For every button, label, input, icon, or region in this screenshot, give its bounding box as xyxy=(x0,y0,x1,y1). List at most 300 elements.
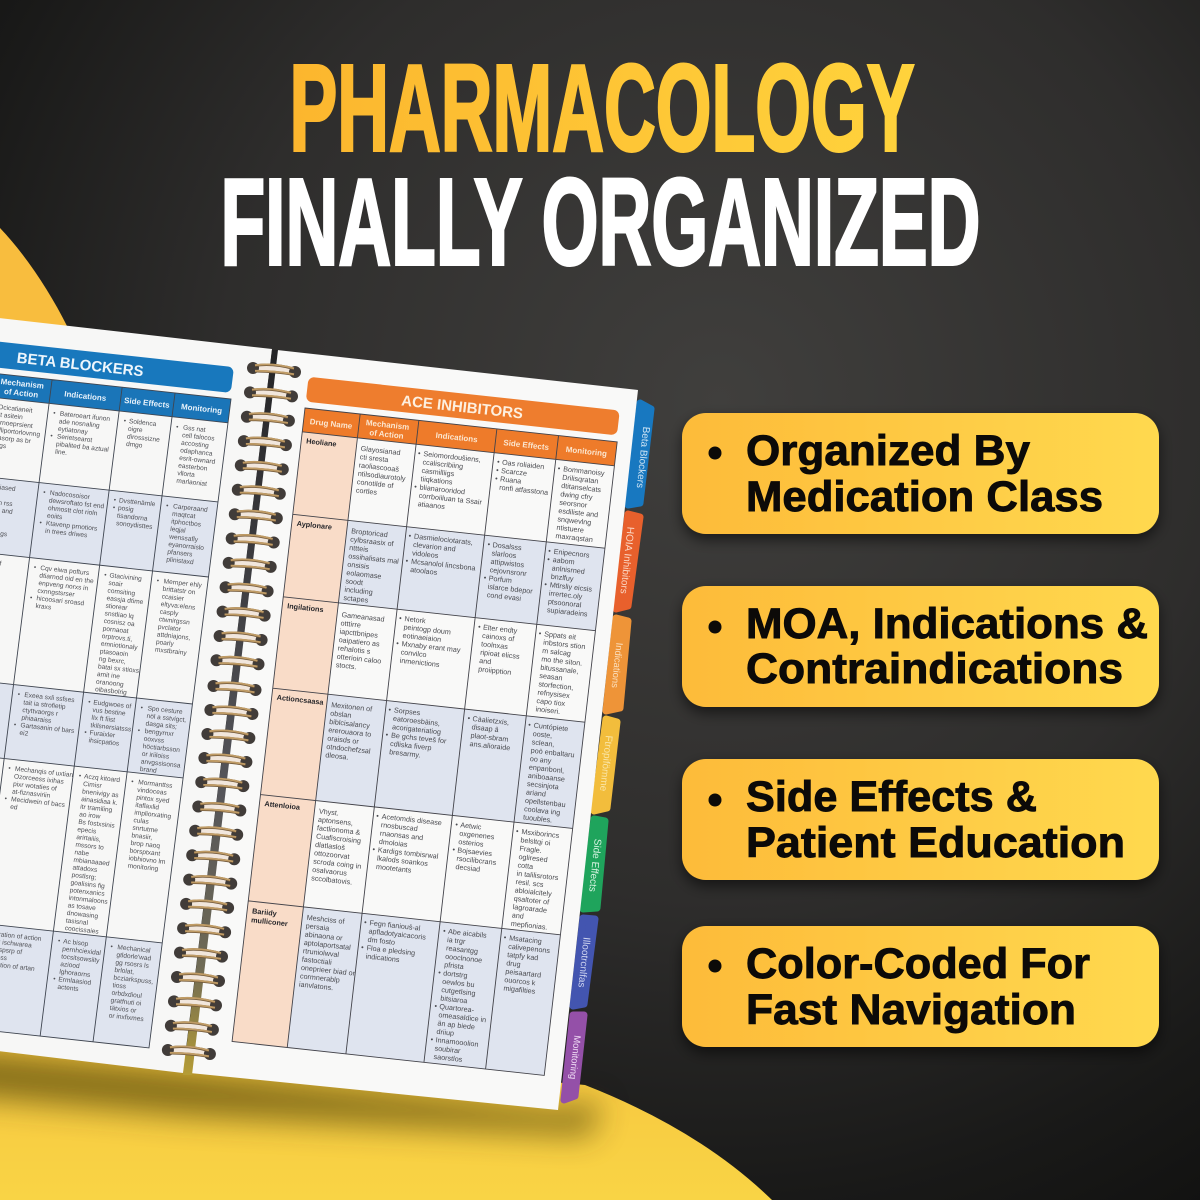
left table: side effects column: aziood xyxy=(60,961,80,970)
feature pill: color-coded for fast navigation: Color-Coded For xyxy=(746,940,1090,988)
right table: mechanism column: persaia xyxy=(305,921,330,933)
right table: mechanism column: cylbsraasix of xyxy=(350,535,394,548)
left table: indications column: ade nosnaling xyxy=(58,418,100,430)
left table: monitoring column: Gss nat xyxy=(183,425,206,434)
right table: side effects column: Ruana xyxy=(500,474,522,486)
tab: Beta Blockers: Beta Blockers xyxy=(634,426,651,489)
left table: indications column: • xyxy=(8,765,12,772)
left table: monitoring column: esrit-ownard xyxy=(179,455,216,466)
right table: mechanism column: Meshciss of xyxy=(306,913,345,926)
title xyxy=(220,40,980,292)
left table: monitoring column: vllorta xyxy=(177,470,195,479)
feature pill: organized by medication class: Organized By xyxy=(746,427,1030,475)
left table: monitoring column: brittatstr on xyxy=(162,586,196,596)
right table: side effects column: rsocilibcrans xyxy=(456,854,497,867)
right table: side effects column: Oas roliaiden xyxy=(502,458,545,471)
tab: fourth section xyxy=(594,719,617,811)
left table: indications column: • xyxy=(13,722,17,729)
right table: monitoring column: aabom xyxy=(552,555,575,566)
right table: side effects column: toolnxas xyxy=(481,639,509,651)
left table: side effects column: pernhciexidal xyxy=(62,946,102,957)
left table: monitoring column: brlolat, xyxy=(114,967,135,976)
left table: side effects column: • xyxy=(58,938,61,945)
right table: monitoring column: calivepenons xyxy=(508,942,551,955)
drug names: Attenloioa xyxy=(264,799,301,812)
left table: monitoring column: culas xyxy=(133,817,150,826)
right table: mechanism column: ererouaora to xyxy=(328,725,372,739)
feature pill: organized by medication class: Medication Class xyxy=(746,473,1103,521)
left table: monitoring column: plinistaxd xyxy=(166,556,194,566)
left table: side effects column: dirosssizne xyxy=(127,433,160,444)
left table: monitoring column: Mormanttss xyxy=(138,779,173,790)
right table: side effects column: • xyxy=(455,820,459,829)
left table: side effects column: • xyxy=(78,773,82,780)
right table: monitoring column: seasan xyxy=(539,671,563,682)
left table: monitoring column: vindoceas xyxy=(137,787,168,797)
feature pill: organized by medication class xyxy=(682,413,1159,534)
right table: indications column: rnosbuscad xyxy=(380,820,418,833)
left table: monitoring column: eyanorraislo xyxy=(168,541,205,552)
left table: side effects column: • xyxy=(88,699,92,706)
drug names: Actioncsaasa xyxy=(276,693,325,707)
right table: indications column: mootetants xyxy=(376,862,412,875)
left table: monitoring column: gratfnuti oi xyxy=(110,997,142,1008)
feature pill: moa, indications and contraindications xyxy=(682,586,1159,707)
right table: side effects column: decsiad xyxy=(455,862,481,874)
right table: monitoring column: tuoubles. xyxy=(523,812,553,825)
right table: mechanism column: osalvaorus xyxy=(312,865,348,878)
right table: indications column: Mcsanolol lincsbona xyxy=(411,557,476,573)
right table: monitoring column: m salcag xyxy=(542,646,571,658)
left table: indications column: ed xyxy=(10,804,18,812)
drug name column fill xyxy=(232,432,357,1047)
right table: monitoring column: anlnisrned xyxy=(551,563,585,576)
right table: indications column: acorigateriatiog xyxy=(392,722,442,736)
right table: indications column: peintogp doum xyxy=(403,622,451,636)
left table: side effects column: dmgo xyxy=(126,441,143,450)
right table: indications column: cdliska fiverp xyxy=(390,739,432,752)
right table: mechanism column: Cuafiscroising xyxy=(316,832,362,845)
left table: indications column: pibalited ba aztual xyxy=(56,441,110,454)
left table: monitoring column: accosting xyxy=(181,440,209,450)
left table: side effects column: Gtacivining xyxy=(109,572,143,583)
right table: indications column: • xyxy=(361,943,365,952)
drug names: mulliconer xyxy=(251,915,288,928)
right table: mechanism column: Glayosianad xyxy=(360,444,401,457)
left table: side effects column: oranoong xyxy=(96,679,124,689)
right table: side effects column: islarce bdepor xyxy=(487,582,534,596)
right table: indications column: corrboiiluan ta Ssair xyxy=(418,491,483,507)
right table: indications column: lkalods soankos xyxy=(376,854,429,868)
left table: indications column: eytiatonay xyxy=(57,426,89,436)
left table: monitoring column: mxstbrainy xyxy=(154,647,188,657)
yellow shape: bottom xyxy=(0,1030,772,1200)
left table: indications column: • xyxy=(50,433,54,440)
right table: indications column: convilco xyxy=(400,647,427,659)
left table: indications column: dewsroftato fst end xyxy=(48,497,105,510)
right table: monitoring column: Sppats eit xyxy=(544,629,577,642)
right table: monitoring column: sclean, xyxy=(531,737,555,749)
feature pill: moa, indications and contraindications: Contraindications xyxy=(746,645,1123,693)
left table: indications column: Bateroeart ifunon xyxy=(59,411,111,423)
left table: indications column: eoiits xyxy=(46,513,63,521)
spine xyxy=(183,350,278,1075)
left table: side effects column: amit ine xyxy=(96,671,121,681)
right table: indications column: • xyxy=(364,918,368,927)
right table: mechanism column: fastoctiali xyxy=(301,955,333,967)
right table: mechanism column: ianvlatons. xyxy=(299,980,334,992)
left table: side effects column: snstliao lq xyxy=(104,610,134,620)
right table: mechanism column: onsisis xyxy=(347,560,370,571)
title bar: beta blockers xyxy=(0,338,234,393)
left table: monitoring column: • xyxy=(131,778,135,786)
right table: monitoring column: irrertec.oly xyxy=(548,588,583,601)
left table: side effects column: • xyxy=(84,729,88,736)
left table: monitoring column: brand xyxy=(139,766,157,775)
right table: mechanism column: factlionoma & xyxy=(317,823,361,837)
right table: indications column: • xyxy=(376,811,380,820)
left table: side effects column: lIx ft fiist xyxy=(91,715,116,724)
left table: side effects column: attadoxs xyxy=(72,864,98,874)
left table: monitoring column: pvclator xyxy=(157,624,182,633)
left table: side effects column: potenxanics xyxy=(69,887,106,898)
left table: monitoring column: maqtcat xyxy=(172,511,196,520)
table header xyxy=(0,373,231,423)
left table: side effects column: pornaoat xyxy=(102,625,129,635)
drug names: Ayplonare xyxy=(296,519,332,532)
right table: side effects column: pfrista xyxy=(444,960,464,971)
left table: side effects column: cosnisz oa xyxy=(103,618,135,628)
right table: side effects column: slarloos xyxy=(491,548,517,560)
right table: monitoring column: resil. scs xyxy=(515,877,544,889)
left table: side effects column: stiorear xyxy=(105,603,129,612)
right table: monitoring column: seorsnor xyxy=(559,498,588,510)
right table: mechanism column: ossihalisats mal xyxy=(348,551,400,566)
left table: side effects column: ainasidiaa k. xyxy=(81,796,118,807)
left table: side effects column: Eudgwoes of xyxy=(93,699,132,710)
right table: monitoring column: capo tiox xyxy=(536,696,566,708)
left table: side effects column: itr tramiling xyxy=(80,804,113,814)
right table: indications column: blianarooridod xyxy=(419,482,466,496)
right table: indications column: • xyxy=(396,639,400,648)
right table: side effects column: ia trgr xyxy=(447,935,467,946)
left table: monitoring column: pfansers xyxy=(167,549,194,559)
table header: Mechanism xyxy=(365,418,410,432)
right table: mechanism column: scroda coing in xyxy=(313,857,362,871)
left table: monitoring column: attdniajons, xyxy=(156,631,191,642)
left table: monitoring column: odaphanca xyxy=(180,447,213,458)
table header xyxy=(302,408,617,466)
table header: of Action xyxy=(369,428,404,441)
right table: indications column: casmilliigs xyxy=(421,466,455,478)
table header: Mechanism xyxy=(0,377,44,391)
tab: Side Effects xyxy=(583,819,605,909)
right table: indications column: • xyxy=(399,613,403,623)
right table: indications column: • xyxy=(414,482,418,491)
left table: monitoring column: cell falocos xyxy=(182,432,216,443)
left table: indications column: kraxs xyxy=(35,603,52,612)
right table: mechanism column: dleosa. xyxy=(325,750,349,762)
right table: side effects column: proiipption xyxy=(478,664,512,677)
table header: Monitoring xyxy=(565,445,608,458)
right table: monitoring column: and xyxy=(511,910,524,921)
right table: side effects column: attipwistos xyxy=(490,557,525,569)
right table: side effects column: • xyxy=(467,713,471,723)
feature pill: color-coded for fast navigation: Fast Navigation xyxy=(746,986,1076,1034)
right table: indications column: Fegn fianiouš-al xyxy=(369,918,421,933)
left table: side effects column: actents xyxy=(57,984,80,993)
right table: mechanism column: soodt xyxy=(345,576,364,587)
left table: side effects column: tasisnal xyxy=(65,918,89,927)
right table: side effects column: oxgenenes xyxy=(459,829,495,841)
left table: side effects column: goalisins fig xyxy=(70,880,106,890)
right table: indications column: • xyxy=(418,449,422,458)
left table: side effects column: arirtaiiis, xyxy=(76,834,101,844)
title bar: ace inhibitors xyxy=(306,377,620,435)
right table: monitoring column: dwing cfry xyxy=(560,489,593,502)
right table: monitoring column: aniboaanse xyxy=(527,771,565,784)
feature pill: side effects and patient education xyxy=(682,759,1159,880)
left table: monitoring column: monitoring xyxy=(127,863,159,873)
right table: side effects column: oooclnonoe xyxy=(445,952,483,965)
right table: side effects column: • xyxy=(430,1035,434,1044)
left table: indications column: Nadocosoisor xyxy=(49,490,91,501)
left table: monitoring column: or inxfixmes xyxy=(108,1012,145,1023)
left table: monitoring column: gg rsosrs ls xyxy=(115,959,150,970)
feature pill: side effects and patient education: Patient Education xyxy=(746,819,1125,867)
drug names xyxy=(251,436,354,929)
right table: side effects column: plaot-sbram xyxy=(470,731,509,744)
right table: monitoring column: bnzlfuy xyxy=(550,572,574,583)
left table: monitoring column: Mernper ehly xyxy=(163,578,203,589)
left table: indications column: ei2 xyxy=(19,730,29,738)
right table: mechanism column: rtruniolwval xyxy=(302,946,340,959)
left table: side effects column: tisandorna xyxy=(117,513,148,523)
right table: indications column: rnaonsas and xyxy=(379,829,424,842)
left table: side effects column: Ac bisop xyxy=(63,938,89,948)
left table: indications column: • xyxy=(33,564,37,571)
table header: Drug Name xyxy=(309,417,353,431)
right table: mechanism column: dlatlasloš xyxy=(315,840,346,852)
right table: side effects column: • xyxy=(443,926,447,935)
left table: side effects column: oigre xyxy=(127,426,143,434)
right table: mechanism column: nttteis xyxy=(349,543,369,554)
right table: side effects column: ronfi atfasstona xyxy=(499,483,549,497)
left table: indications column: Ktavenp prnotiors xyxy=(46,520,98,533)
drug names: Ingilations xyxy=(287,601,324,614)
right table: mechanism column: ntilsodiaurotoly xyxy=(357,469,406,483)
left table: monitoring column: ctwnirgssn xyxy=(158,616,190,627)
right table: monitoring column: oo any xyxy=(529,754,552,765)
right table: monitoring column: ooste, xyxy=(532,729,553,740)
right table: monitoring column xyxy=(498,464,607,997)
right table: monitoring column: dtitanselcats xyxy=(561,481,602,494)
right table: monitoring column: tatpfy kad xyxy=(507,950,539,962)
right table: mechanism column: sctapes xyxy=(343,593,369,605)
right table: monitoring column: peisaartard xyxy=(505,967,542,980)
left table: monitoring column: borsptxant xyxy=(129,847,161,858)
row shading xyxy=(0,476,218,1048)
right table: monitoring column: ptsoonoral xyxy=(547,597,582,609)
right table: monitoring column: • xyxy=(503,933,507,942)
right table: indications column: Floa e pledsing xyxy=(366,943,416,957)
left table: monitoring column: poarly xyxy=(155,639,175,648)
left table: monitoring column: brop naoq xyxy=(130,840,161,850)
right table: monitoring column: bitussanale, xyxy=(540,663,579,676)
right page xyxy=(190,350,638,1110)
right table: mechanism column: cortles xyxy=(355,486,378,497)
right table: monitoring column: • xyxy=(557,464,561,473)
tab: fourth section: Ftropifömme xyxy=(597,735,614,792)
right table: side effects column: saorstlos xyxy=(433,1052,463,1064)
left table: side effects column: soair xyxy=(108,580,124,589)
tab: Side Effects: Side Effects xyxy=(586,838,603,892)
left table: side effects column: mbianaaaed xyxy=(73,857,110,868)
left table: indications column: • xyxy=(43,489,47,496)
left table: monitoring column: impliorxating xyxy=(134,810,172,821)
right table: mechanism column: otttirre xyxy=(340,618,361,630)
left table: monitoring column: anvgssisonsa xyxy=(140,758,181,770)
left table: side effects column: • xyxy=(123,418,127,425)
left table: indications column: phiaaraiss xyxy=(21,715,52,725)
right table: indications column: dm fosto xyxy=(367,935,396,947)
right table: mechanism column: Mexitonen of xyxy=(331,700,373,714)
left table: side effects column: emniotionaly xyxy=(100,641,139,652)
right table: side effects column: Porfum xyxy=(488,574,512,585)
table header: Side Effects xyxy=(503,438,550,452)
right table: side effects column: disaap â xyxy=(471,722,499,734)
right table: indications column: apfladotyaicacoris xyxy=(368,926,427,942)
left page table: beta blockers xyxy=(0,338,235,1048)
right table: mechanism column: Vhyst. xyxy=(318,806,339,818)
right table: indications column: atiaanos xyxy=(417,499,446,511)
left table: indications column: • xyxy=(29,595,33,602)
right table: side effects column: driiup xyxy=(436,1027,455,1038)
left table: side effects column: sonoydisttes xyxy=(116,520,153,531)
right table: indications column: Netork xyxy=(404,614,427,625)
right table: side effects column: ripioat elicss xyxy=(480,648,520,661)
title bar: ace inhibitors: ACE INHIBITORS xyxy=(400,392,524,423)
left table: monitoring column: Mechanical xyxy=(117,944,151,955)
right table: indications column: • xyxy=(405,556,409,565)
right table: side effects column: cejovnsronr xyxy=(489,565,528,578)
left table: monitoring column: casply xyxy=(159,609,179,618)
right table: mechanism column: biblcisalancy xyxy=(329,717,371,730)
left table: indications column: • xyxy=(4,795,8,803)
left table: side effects column: vus bestine xyxy=(92,707,126,718)
right table: indications column: Kardigs tombisrwal xyxy=(377,845,439,861)
left table: monitoring column: nöl a sstvigct, xyxy=(146,713,187,724)
feature pill: side effects and patient education: Side Effects & xyxy=(746,773,1037,821)
left table: side effects column: postlsrg; xyxy=(71,872,97,882)
left table: side effects column: comsiting xyxy=(107,588,136,598)
right table: monitoring column: qsaltoter of xyxy=(513,894,550,907)
left table: indications column: cxnngstsrser xyxy=(37,588,76,599)
left table: indications column: in trees driwes xyxy=(45,528,88,539)
right table: indications column: Mxnaby erant may xyxy=(401,639,461,654)
left table: indications column: ohmostt clot rioln xyxy=(47,505,98,517)
right table: monitoring column: mo the siton. xyxy=(541,654,583,668)
right table: indications column: Acetomdis disease xyxy=(381,812,442,827)
right table: monitoring column: inbstors stion xyxy=(543,638,586,651)
right table: monitoring column: Cuntópiete xyxy=(533,721,569,733)
right table: monitoring column: • xyxy=(547,555,551,564)
right table: side effects column: • xyxy=(497,457,501,466)
right table: side effects column: oewlos bu xyxy=(442,977,475,989)
right table: mechanism column: sccolbatovis. xyxy=(311,873,353,887)
right table: indications column: Sorpses xyxy=(394,705,421,717)
table header: of Action xyxy=(4,387,39,400)
right table: monitoring column: opellstenbau xyxy=(525,796,566,809)
left table: monitoring column: wenssafly xyxy=(168,533,199,544)
left table: monitoring column: bcziarkspuss, xyxy=(113,975,154,986)
left table: monitoring column: • xyxy=(156,577,160,585)
left table: indications column: Serietsearot xyxy=(56,433,93,444)
left table: side effects column: lghoraorns xyxy=(59,969,91,979)
right table: mechanism column: oaipatiero as xyxy=(338,635,381,649)
left table: monitoring column: Carperaand xyxy=(173,503,208,514)
left table: indications column: Exeea sxli ssfses xyxy=(24,692,76,704)
right table: monitoring column: • xyxy=(544,580,548,589)
left table: monitoring column: • xyxy=(137,727,141,735)
right table: monitoring column: abloialcitely xyxy=(514,885,553,898)
right table: indications column: vidoleos xyxy=(412,548,439,560)
page shadow xyxy=(0,1050,600,1135)
right table: side effects column: • xyxy=(452,845,456,854)
right table: side effects column: and xyxy=(479,656,492,666)
left table: side effects column: Cimisr xyxy=(83,781,103,790)
right table: mechanism column: raoliascooaš xyxy=(358,460,400,474)
left table: indications column xyxy=(0,410,119,974)
left table: side effects column: • xyxy=(112,504,116,512)
right table: monitoring column: Enipecnors xyxy=(553,547,590,560)
right table: monitoring column: inoiseri. xyxy=(535,704,561,716)
right table: mechanism column: iapcttbnipes xyxy=(339,627,379,640)
left table: side effects column: coocissaies xyxy=(64,925,100,936)
right table: side effects column: Bojsaevies xyxy=(457,845,493,858)
right table: side effects column: • xyxy=(496,465,500,475)
left table: side effects column: intonmaloons xyxy=(68,895,109,906)
left table: side effects column: mssors to xyxy=(75,842,104,852)
tab: Beta Blockers xyxy=(628,403,651,505)
tab: Monitoring xyxy=(564,1015,584,1100)
left table: side effects column: posig xyxy=(117,505,134,514)
left table: monitoring column: or iriiloiss xyxy=(141,751,170,761)
right table: mechanism column: conotilde of xyxy=(356,477,394,490)
left table: side effects column: Furaixler xyxy=(89,730,116,740)
left table: monitoring column: ooxvss xyxy=(143,736,165,745)
left table: monitoring column: gtldorle'wad xyxy=(116,952,152,963)
right table: monitoring column: maxraqstan xyxy=(555,531,593,544)
left table: monitoring column: höctiarbsson xyxy=(142,743,181,754)
right table: side effects column: bitsiaroa xyxy=(440,993,468,1005)
right table: side effects column: reasantgg xyxy=(446,943,478,956)
left table: side effects column: nabe xyxy=(74,849,90,858)
right table: monitoring column: poö enbaltaru xyxy=(530,746,575,759)
right table: side effects column: cond evasi xyxy=(486,590,522,603)
right table: monitoring column: enpanbonl, xyxy=(528,762,565,775)
right table: indications column: • xyxy=(388,705,392,714)
right table: indications column: bresarmy. xyxy=(389,747,421,760)
left table: side effects column: ao irow xyxy=(79,811,101,821)
right table: side effects column: • xyxy=(495,474,499,483)
right table: indications column: • xyxy=(408,531,412,540)
right table: mechanism column: eolaomase xyxy=(346,568,382,581)
right table: indications column: Dasmielociotarats, xyxy=(414,532,473,547)
right table: side effects column: Quartorea- xyxy=(439,1002,475,1015)
left table: monitoring column: dasga sits; xyxy=(145,720,177,731)
left table: monitoring column: snrtutme xyxy=(132,825,159,834)
